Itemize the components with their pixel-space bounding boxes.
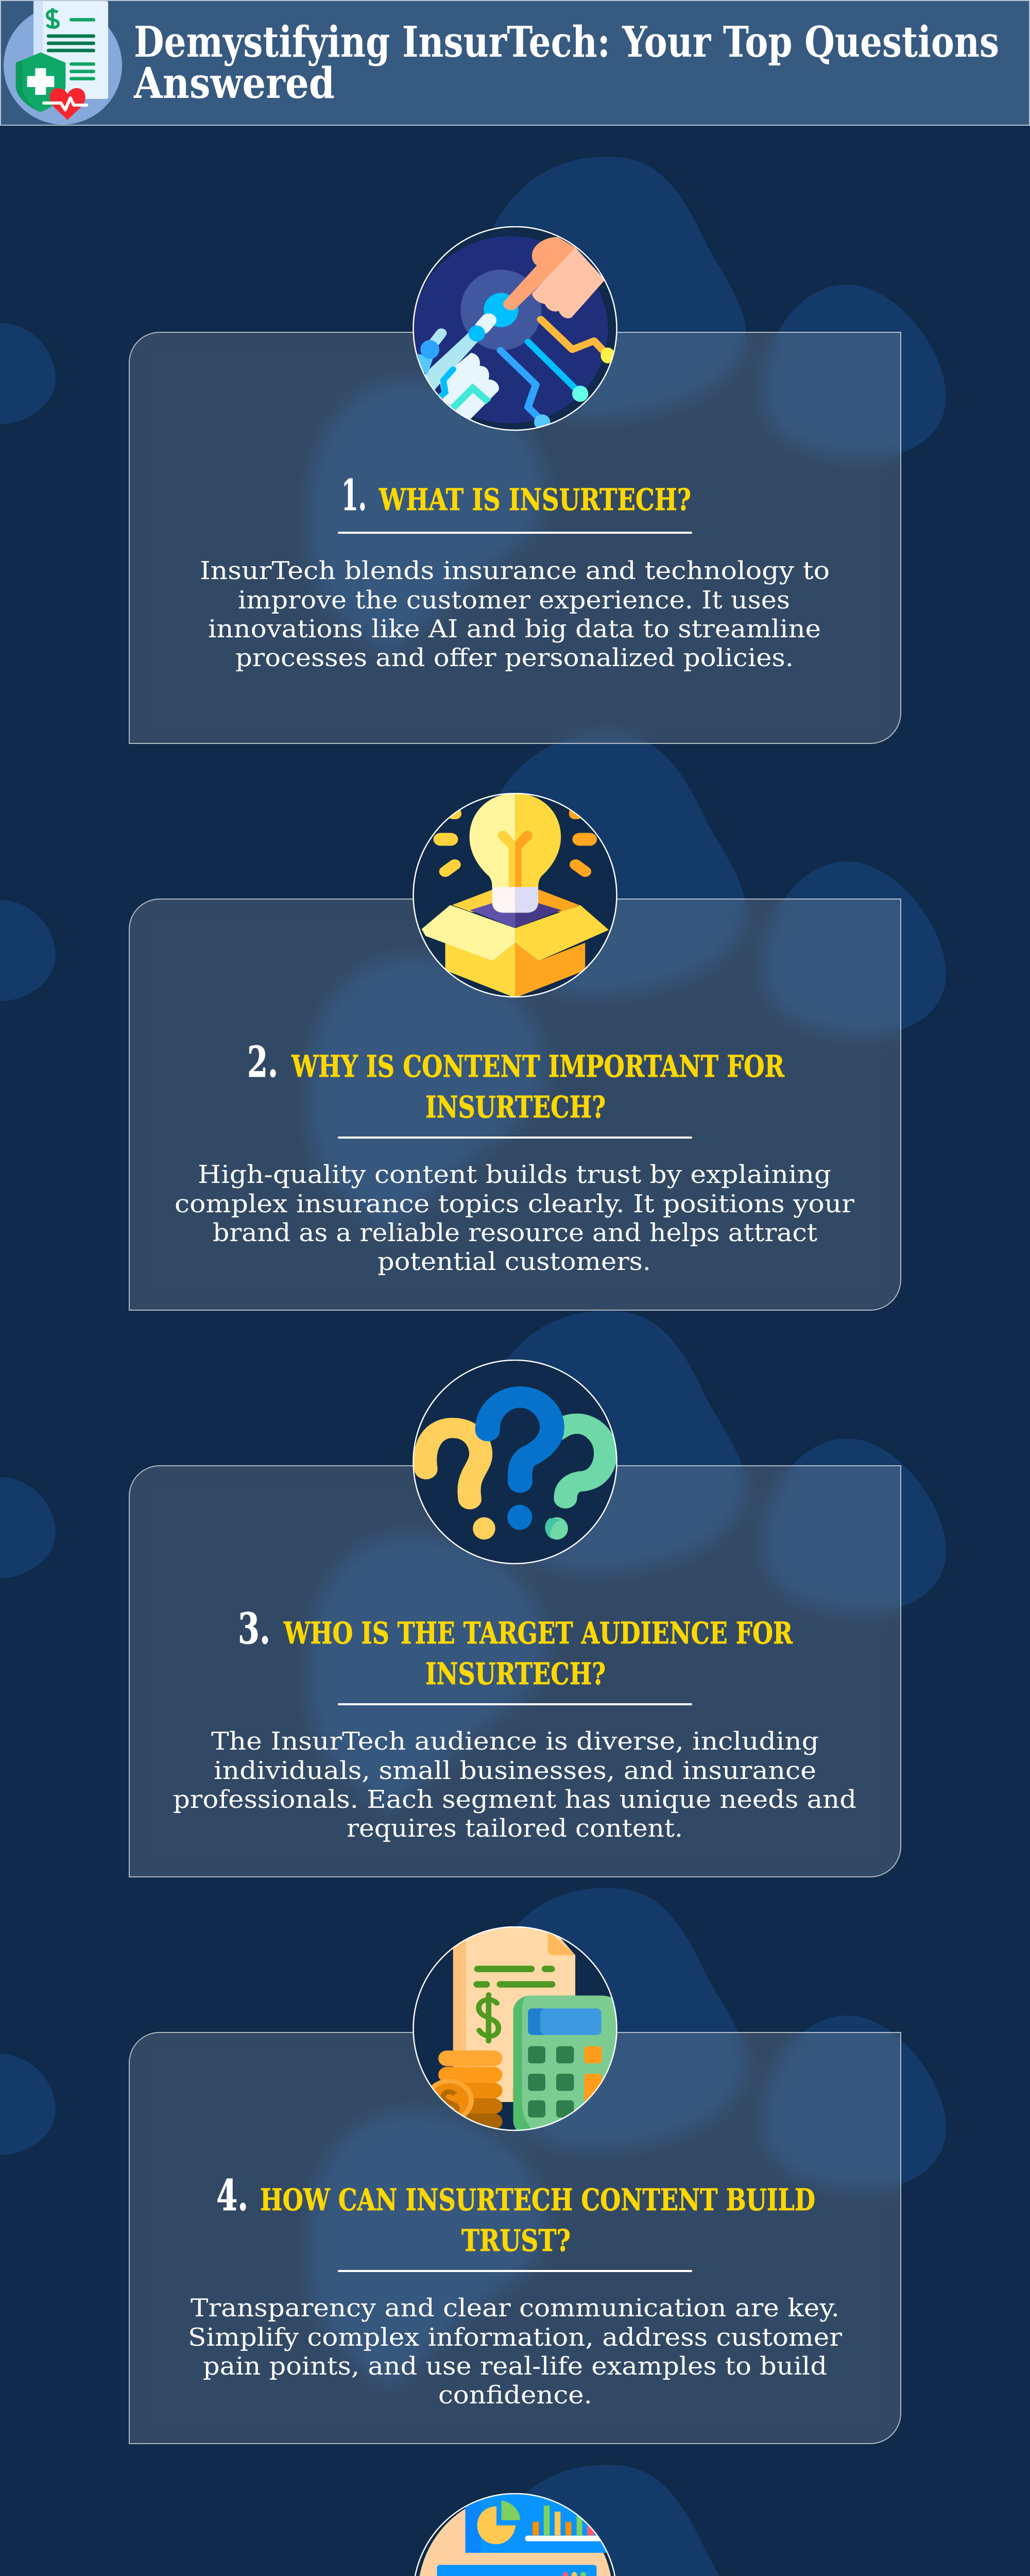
heading: [341, 471, 691, 520]
body text: [175, 1160, 854, 1276]
heading: 4.: [216, 2171, 248, 2221]
heading: WHAT IS INSURTECH?: [379, 482, 691, 517]
body text: pain points, and use real-life examples to build: [203, 2352, 827, 2381]
body text: processes and offer personalized policies.: [235, 643, 794, 672]
heading: INSURTECH?: [425, 1090, 606, 1125]
heading: 3.: [238, 1604, 270, 1654]
icon: insurance document with shield and heart: [4, 1, 122, 125]
icon: invoice, coins and calculator: [413, 1923, 619, 2137]
body text: improve the customer experience. It uses: [238, 586, 790, 615]
body text: individuals, small businesses, and insurance: [214, 1756, 816, 1785]
body text: Transparency and clear communication are key.: [191, 2294, 839, 2323]
title: Answered: [133, 59, 335, 108]
body text: InsurTech blends insurance and technology to: [200, 556, 830, 585]
heading: 2.: [247, 1038, 278, 1087]
body text: [188, 2294, 842, 2410]
heading: [247, 1038, 785, 1125]
body text: potential customers.: [377, 1247, 651, 1276]
body text: Simplify complex information, address customer: [188, 2323, 842, 2352]
panel: question 5: [414, 2493, 616, 2576]
heading: TRUST?: [461, 2223, 571, 2258]
icon: analytics dashboard with magnifier: [413, 2490, 617, 2576]
body text: innovations like AI and big data to streamline: [208, 615, 821, 643]
body text: professionals. Each segment has unique needs and: [173, 1785, 856, 1814]
icon: three question marks: [413, 1360, 617, 1564]
body text: [200, 556, 830, 672]
panel: question 1: [129, 226, 901, 744]
panel: question 2: [129, 793, 901, 1311]
heading: [216, 2171, 815, 2258]
heading: INSURTECH?: [425, 1656, 606, 1691]
panel: question 4: [129, 1926, 901, 2444]
icon: light bulb in open box: [413, 793, 617, 998]
heading: 1.: [341, 471, 367, 520]
panel: question 3: [129, 1360, 901, 1877]
body text: complex insurance topics clearly. It positions your: [175, 1190, 854, 1218]
body text: High-quality content builds trust by explaining: [198, 1160, 831, 1189]
body text: requires tailored content.: [347, 1814, 683, 1843]
heading: [238, 1604, 793, 1691]
header banner: [0, 0, 1030, 126]
title: [133, 18, 999, 108]
body text: [173, 1727, 856, 1843]
body text: The InsurTech audience is diverse, including: [211, 1727, 819, 1756]
body text: confidence.: [438, 2381, 592, 2410]
heading: WHY IS CONTENT IMPORTANT FOR: [291, 1049, 785, 1084]
icon: hand touching circuit: [413, 227, 617, 431]
body text: brand as a reliable resource and helps attract: [213, 1218, 817, 1247]
